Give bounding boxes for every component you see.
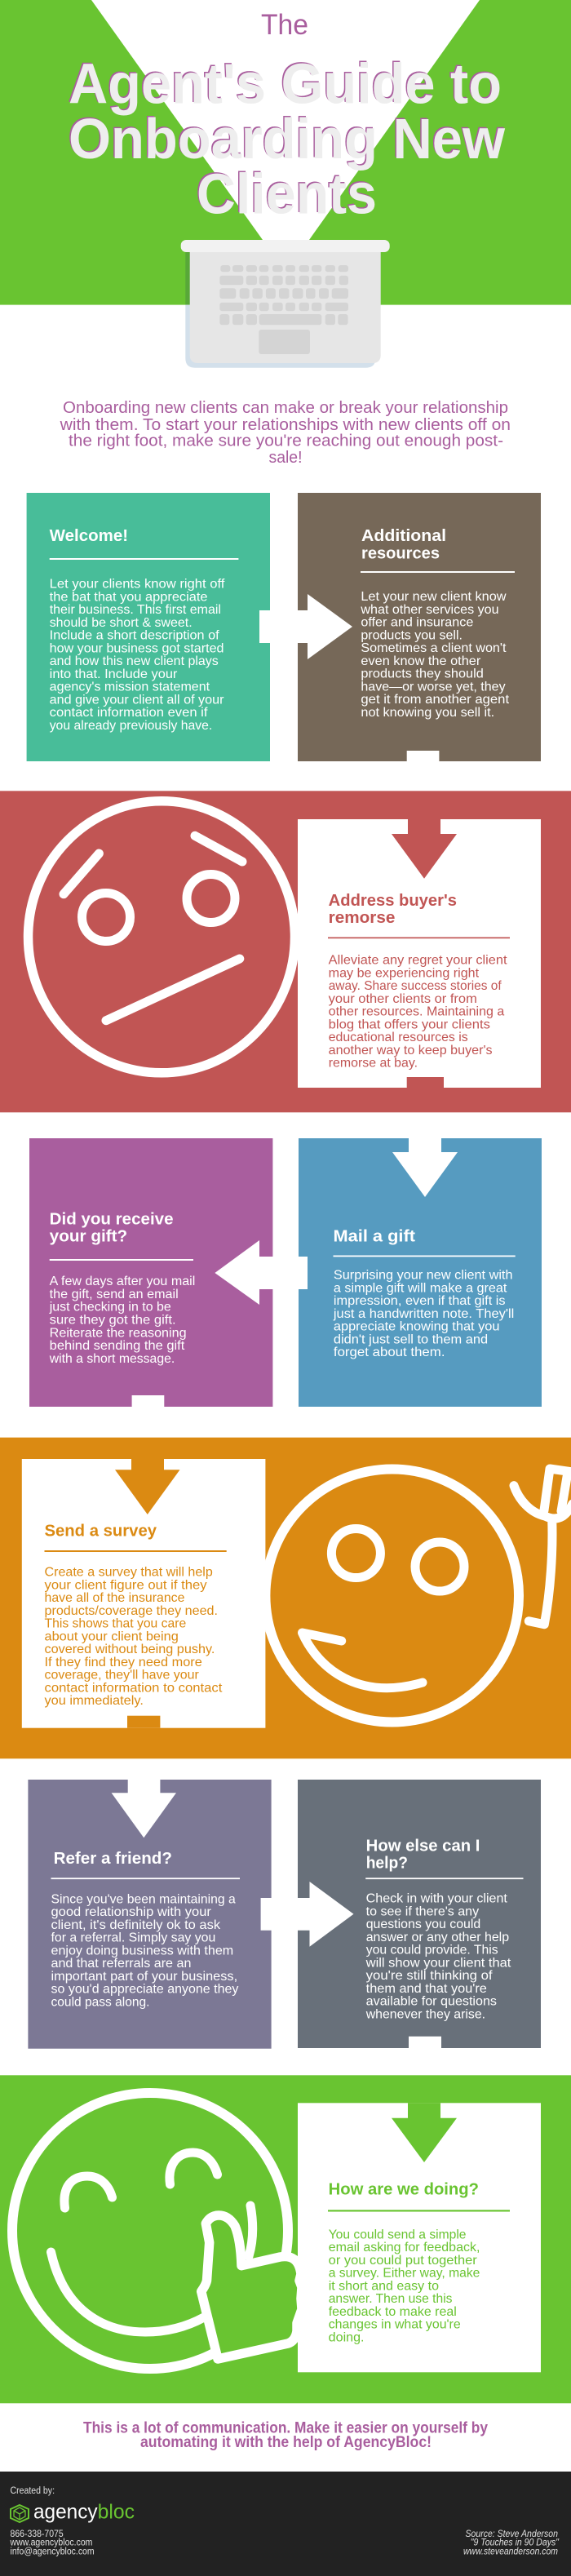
- text: welcome body: into that. Include your: [50, 667, 178, 681]
- text: how are we doing body: changes in what you're: [329, 2318, 461, 2332]
- text: welcome body: the bat that you appreciate: [50, 590, 208, 604]
- text: refer a friend body: client, it's definitely ok to ask: [51, 1918, 221, 1932]
- text: address buyer's remorse body: away. Share success stories of: [329, 979, 502, 993]
- icon: laptop: [181, 240, 390, 368]
- text: send a survey body: coverage, they'll have your: [44, 1669, 199, 1683]
- text: contact details: [10, 2529, 95, 2556]
- text: how else can I help body: available for questions: [366, 1995, 497, 2009]
- arrow: right: [259, 594, 352, 659]
- text: mail a gift body: appreciate knowing that you: [334, 1320, 499, 1334]
- text: did you receive your gift body: A few days after you mail: [50, 1275, 195, 1288]
- text: source: "9 Touches in 90 Days": [471, 2538, 560, 2548]
- text: mail a gift body: just a handwritten note. They'll: [333, 1307, 514, 1321]
- heading: additional resources: Additional: [361, 527, 446, 545]
- text: welcome body: how your business got started: [50, 641, 224, 655]
- intro text: Onboarding new clients can make or break your relationship: [63, 399, 508, 417]
- text: contact details: info@agencybloc.com: [10, 2547, 95, 2556]
- text: mail a gift body: didn't just sell to them and: [334, 1332, 488, 1346]
- text: additional resources body: products you sell.: [361, 628, 463, 642]
- footer: [0, 2472, 571, 2576]
- text: welcome body: and give your client all of your: [50, 693, 224, 707]
- text: welcome body: Include a short description of: [50, 629, 219, 643]
- panel: how else can I help: [298, 1780, 541, 2048]
- heading: did you receive your gift: your gift?: [50, 1228, 127, 1246]
- intro text: with them. To start your relationships with new clients off on: [60, 416, 511, 434]
- text: refer a friend body: important part of your business,: [51, 1970, 237, 1984]
- text: address buyer's remorse body: [329, 954, 507, 1071]
- text: send a survey body: have all of the insurance: [44, 1591, 184, 1605]
- arrow: right: [261, 1882, 354, 1947]
- text: send a survey body: This shows that you care: [44, 1617, 186, 1631]
- text: mail a gift body: impression, even if that gift is: [334, 1294, 506, 1308]
- panel: send a survey: [0, 1438, 571, 1758]
- text: send a survey body: you immediately.: [44, 1694, 144, 1708]
- text: mail a gift body: Surprising your new client with: [334, 1269, 512, 1283]
- text: source: www.steveanderson.com: [463, 2547, 558, 2556]
- text: did you receive your gift body: the gift, send an email: [50, 1288, 179, 1301]
- heading: did you receive your gift: Did you receive: [50, 1211, 174, 1229]
- heading: address buyer's remorse: Address buyer's: [329, 892, 457, 910]
- heading: how else can I help: How else can I: [366, 1837, 480, 1855]
- text: additional resources body: even know the other: [361, 654, 481, 668]
- text: send a survey body: covered without being pushy.: [44, 1643, 215, 1656]
- heading: did you receive your gift: [50, 1211, 174, 1246]
- text: welcome body: agency's mission statement: [50, 681, 210, 694]
- closing call to action: This is a lot of communication. Make it easier on yourself by: [83, 2420, 488, 2437]
- text: how are we doing body: email asking for feedback,: [329, 2241, 480, 2255]
- text: source: [463, 2529, 560, 2556]
- text: address buyer's remorse body: other resources. Maintaining a: [329, 1005, 504, 1019]
- text: how else can I help body: questions you could: [366, 1918, 480, 1931]
- heading: send a survey: Send a survey: [44, 1523, 157, 1541]
- text: mail a gift body: forget about them.: [334, 1346, 445, 1359]
- arrow: down: [112, 1780, 176, 1838]
- panel: address buyer's remorse: [0, 791, 571, 1112]
- title: Agent's Guide to: [69, 52, 502, 116]
- text: additional resources body: have—or worse yet, they: [361, 680, 506, 694]
- text: did you receive your gift body: [49, 1275, 195, 1366]
- text: address buyer's remorse body: another way to keep buyer's: [329, 1044, 493, 1057]
- text: source: Source: Steve Anderson: [465, 2529, 558, 2539]
- title: Onboarding New: [69, 107, 506, 171]
- logo: agencybloc: [11, 2501, 135, 2524]
- text: did you receive your gift body: Reiterate the reasoning: [50, 1326, 187, 1340]
- title: Clients: [196, 161, 375, 224]
- title: Clients: [197, 162, 377, 226]
- text: welcome body: [50, 578, 225, 733]
- text: additional resources body: what other services you: [360, 603, 499, 617]
- text: how are we doing body: it short and easy to: [329, 2279, 439, 2293]
- text: did you receive your gift body: sure they got the gift.: [50, 1314, 176, 1327]
- logo: agencybloc: agency: [33, 2501, 98, 2524]
- text: did you receive your gift body: behind sending the gift: [50, 1339, 185, 1353]
- text: how else can I help body: Check in with your client: [366, 1892, 507, 1906]
- icon: waving smiley face: [265, 1469, 571, 1722]
- text: welcome body: and how this new client plays: [50, 654, 219, 668]
- arrow: down: [392, 2103, 457, 2162]
- text: additional resources body: get it from another agent: [361, 693, 510, 707]
- title: The: [261, 9, 308, 41]
- text: address buyer's remorse body: remorse at bay.: [329, 1057, 418, 1071]
- heading: how else can I help: [366, 1837, 480, 1872]
- text: additional resources body: products they should: [361, 667, 484, 681]
- text: send a survey body: contact information to contact: [44, 1681, 223, 1695]
- text: how else can I help body: [365, 1892, 511, 2021]
- logo: agencybloc: bloc: [98, 2501, 135, 2524]
- text: additional resources body: offer and insurance: [361, 615, 473, 630]
- icon: thumbs-up smiley face: [12, 2093, 302, 2369]
- text: additional resources body: Let your new client know: [361, 590, 507, 604]
- icon: skeptical face: [28, 801, 295, 1073]
- text: refer a friend body: and that referrals are an: [51, 1957, 191, 1971]
- text: welcome body: contact information even if: [50, 706, 208, 720]
- text: welcome body: their business. This first email: [50, 603, 221, 617]
- text: how else can I help body: them and that you're: [366, 1982, 487, 1996]
- title: Agent's Guide to: [67, 51, 501, 114]
- text: mail a gift body: [333, 1269, 514, 1359]
- arrow: down: [115, 1459, 179, 1514]
- panel: additional resources: [298, 493, 541, 761]
- heading: additional resources: resources: [361, 545, 440, 563]
- text: did you receive your gift body: just checking in to be: [49, 1301, 171, 1315]
- intro text: the right foot, make sure you're reaching out enough post-: [69, 432, 503, 450]
- text: send a survey body: your client figure out if they: [44, 1578, 207, 1592]
- title: Onboarding New: [67, 106, 504, 170]
- arrow: left: [215, 1240, 308, 1305]
- text: how are we doing body: [329, 2228, 480, 2344]
- text: refer a friend body: so you'd appreciate anyone they: [51, 1983, 238, 1996]
- text: how are we doing body: You could send a simple: [329, 2228, 467, 2241]
- text: refer a friend body: good relationship with your: [51, 1905, 212, 1919]
- text: address buyer's remorse body: educational resources is: [329, 1031, 468, 1044]
- intro text: [60, 399, 511, 467]
- text: send a survey body: If they find they need more: [44, 1656, 202, 1669]
- text: welcome body: you already previously have.: [50, 719, 212, 733]
- text: refer a friend body: for a referral. Simply say you: [51, 1931, 215, 1945]
- heading: mail a gift: Mail a gift: [333, 1228, 415, 1246]
- heading: welcome: Welcome!: [50, 527, 128, 545]
- text: send a survey body: about your client being: [44, 1629, 179, 1643]
- text: contact details: www.agencybloc.com: [10, 2538, 92, 2548]
- heading: address buyer's remorse: [329, 892, 457, 927]
- text: additional resources body: [360, 590, 510, 720]
- text: how else can I help body: you're still thinking of: [366, 1969, 493, 1983]
- text: how else can I help body: you could provide. This: [366, 1944, 498, 1957]
- text: address buyer's remorse body: Alleviate any regret your client: [329, 954, 507, 968]
- heading: how else can I help: help?: [366, 1854, 408, 1872]
- text: refer a friend body: enjoy doing business with them: [51, 1944, 233, 1957]
- arrow: down: [392, 1138, 458, 1197]
- text: how else can I help body: answer or any other help: [366, 1931, 509, 1944]
- text: send a survey body: [44, 1566, 223, 1708]
- text: contact details: 866-338-7075: [10, 2529, 64, 2539]
- text: refer a friend body: Since you've been maintaining a: [51, 1892, 236, 1906]
- text: how else can I help body: whenever they arise.: [365, 2007, 485, 2021]
- text: send a survey body: Create a survey that will help: [44, 1566, 213, 1580]
- heading: refer a friend: Refer a friend?: [54, 1850, 172, 1868]
- text: mail a gift body: a simple gift will make a great: [334, 1281, 507, 1295]
- text: how else can I help body: will show your client that: [365, 1956, 511, 1970]
- text: send a survey body: products/coverage they need.: [44, 1604, 218, 1618]
- arrow: down: [392, 819, 457, 879]
- heading: address buyer's remorse: remorse: [329, 909, 395, 927]
- header banner: [0, 0, 571, 305]
- intro text: sale!: [269, 449, 302, 467]
- panel: did you receive your gift: [29, 1138, 272, 1407]
- text: created by: Created by:: [10, 2486, 55, 2496]
- text: how are we doing body: a survey. Either way, make: [329, 2267, 480, 2281]
- text: additional resources body: not knowing you sell it.: [361, 706, 494, 720]
- text: refer a friend body: [51, 1892, 238, 2009]
- text: address buyer's remorse body: blog that offers your clients: [329, 1018, 490, 1031]
- text: how else can I help body: to see if there's any: [366, 1904, 479, 1918]
- text: how are we doing body: doing.: [329, 2330, 364, 2344]
- text: additional resources body: Sometimes a client won't: [361, 641, 507, 655]
- text: address buyer's remorse body: your other clients or from: [329, 992, 477, 1006]
- panel: mail a gift: [299, 1138, 542, 1407]
- text: refer a friend body: could pass along.: [51, 1995, 150, 2009]
- text: did you receive your gift body: with a short message.: [49, 1352, 175, 1366]
- panel: how are we doing: [0, 2075, 571, 2403]
- text: how are we doing body: or you could put together: [329, 2254, 477, 2268]
- closing call to action: [83, 2420, 488, 2451]
- text: address buyer's remorse body: may be experiencing right: [329, 966, 480, 981]
- closing call to action: automating it with the help of AgencyBloc!: [140, 2434, 432, 2451]
- text: how are we doing body: answer. Then use this: [329, 2292, 452, 2306]
- title: [67, 9, 506, 226]
- heading: how are we doing: How are we doing?: [329, 2180, 479, 2198]
- heading: additional resources: [361, 527, 446, 563]
- panel: refer a friend: [28, 1780, 272, 2049]
- text: welcome body: should be short & sweet.: [50, 616, 193, 630]
- panel: welcome: [27, 493, 270, 761]
- text: welcome body: Let your clients know right off: [50, 578, 225, 592]
- text: how are we doing body: feedback to make real: [329, 2305, 457, 2319]
